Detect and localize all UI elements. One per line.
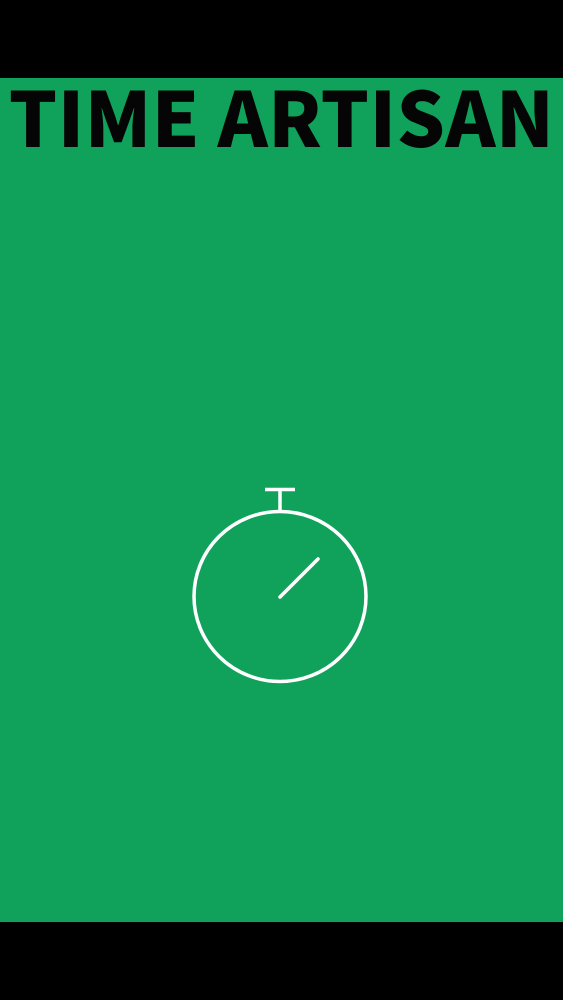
- title: TIME ARTISAN: [9, 59, 554, 169]
